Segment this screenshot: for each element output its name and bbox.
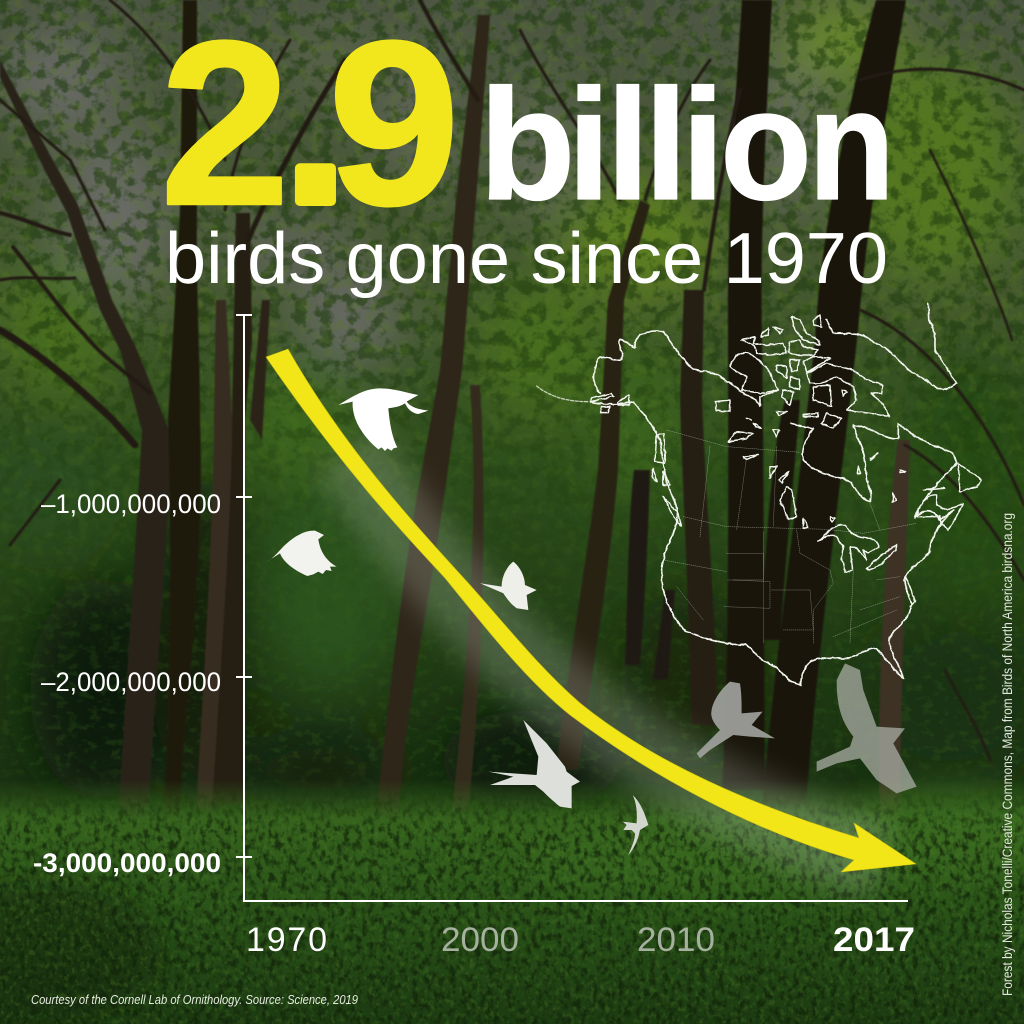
headline unit: o xyxy=(720,57,812,233)
photo credit: Forest by Nicholas Tonelli/Creative Commons, Map from Birds of North America birdsna.org xyxy=(999,513,1015,996)
forest photo background xyxy=(0,0,1024,792)
x axis labels: 2010 xyxy=(637,921,715,959)
bird: soaring at top xyxy=(338,388,428,451)
chart axes xyxy=(236,315,908,901)
y axis labels: –1,000,000,000 xyxy=(41,489,221,519)
map: Pacific islands xyxy=(652,433,682,527)
bird: faintest large bird xyxy=(817,663,917,793)
mist behind the trend arrow xyxy=(350,450,880,860)
map: east coast bay xyxy=(905,552,930,607)
x axis labels xyxy=(246,921,915,959)
y axis labels: –2,000,000,000 xyxy=(41,667,221,697)
headline number: . xyxy=(285,2,346,248)
x axis labels: 2017 xyxy=(833,921,915,959)
headline unit: l xyxy=(644,57,688,233)
source note: Courtesy of the Cornell Lab of Ornithology. Source: Science, 2019 xyxy=(31,992,358,1007)
fern understory xyxy=(0,780,1024,1024)
headline unit: b xyxy=(479,57,576,233)
subheading: birds gone since 1970 xyxy=(165,219,888,299)
map: Arctic islands xyxy=(590,315,890,460)
headline unit: i xyxy=(681,57,725,233)
headline unit: i xyxy=(567,57,611,233)
headline number xyxy=(160,0,460,254)
map: Aleutian chain xyxy=(537,386,588,402)
y axis labels: -3,000,000,000 xyxy=(33,848,221,878)
tree trunks xyxy=(0,0,910,832)
map: coastline xyxy=(590,331,957,685)
x axis labels: 2000 xyxy=(441,921,519,959)
map: Great Lakes xyxy=(818,525,897,573)
x axis labels: 1970 xyxy=(246,921,327,959)
bird: swallow xyxy=(488,720,580,808)
headline xyxy=(160,0,895,299)
bird: swift xyxy=(623,795,648,855)
map: state and province borders xyxy=(663,430,917,643)
map: Greenland coast xyxy=(827,303,957,389)
headline unit xyxy=(479,57,895,233)
headline unit: n xyxy=(808,57,895,233)
bird: fading grey bird xyxy=(697,682,775,758)
headline unit: l xyxy=(606,57,650,233)
bird: right of arrow xyxy=(480,562,537,610)
bird: left of arrow xyxy=(267,531,337,576)
decline arrow xyxy=(266,349,916,872)
map: Hudson Bay and Labrador islands xyxy=(770,390,982,530)
y axis labels xyxy=(33,489,221,878)
map of North America xyxy=(537,303,982,685)
